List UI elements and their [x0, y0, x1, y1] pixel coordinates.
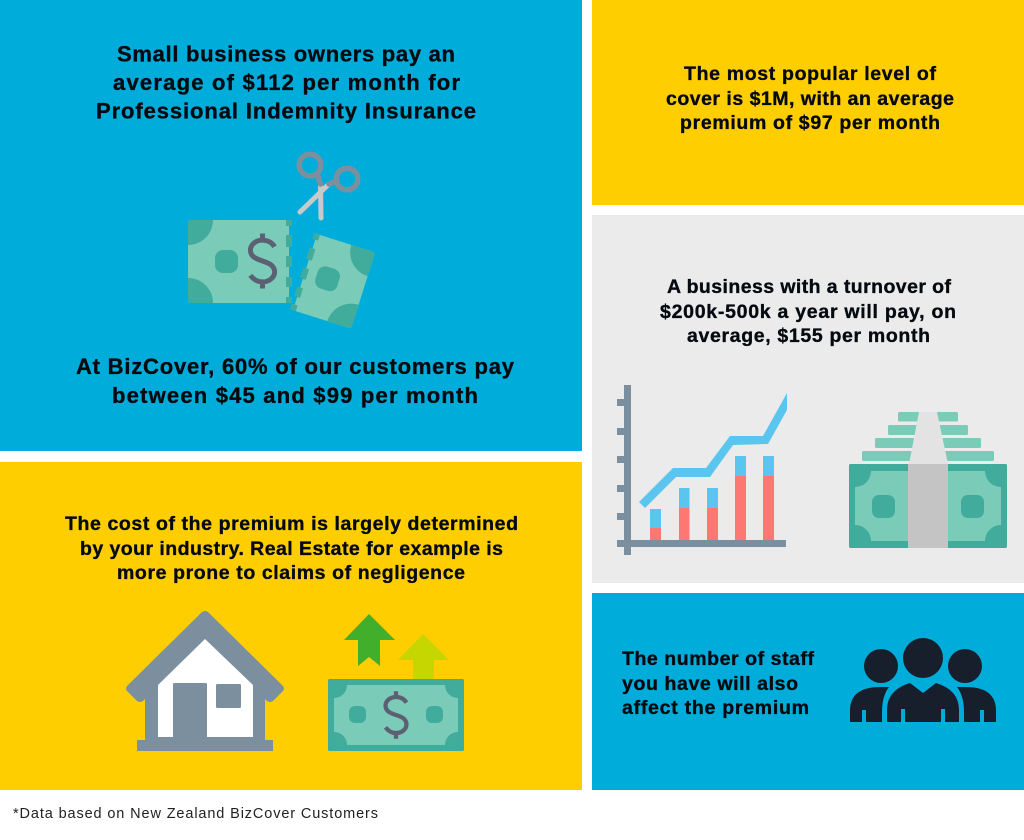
icon: banknote with rising arrows: [328, 614, 464, 751]
panel: turnover: [592, 215, 1024, 583]
text: BizCover customers: [76, 354, 515, 408]
panel: popular cover: [592, 0, 1024, 205]
text: turnover premium: average, $155 per month: [687, 325, 930, 347]
text: industry determines cost: The cost of the premium is largely determined: [65, 513, 518, 535]
text: popular level of cover: The most popular level of: [684, 63, 936, 85]
icon: left bill piece: [188, 220, 292, 303]
icon: right bill piece: [290, 233, 375, 329]
text: turnover premium: A business with a turnover of: [667, 276, 952, 298]
icon: scissors cutting a banknote: [188, 154, 375, 329]
text: popular level of cover: [666, 63, 954, 134]
text: popular level of cover: cover is $1M, with an average: [666, 88, 954, 110]
text: BizCover customers: between $45 and $99 per month: [112, 383, 478, 408]
heading: average premium: Professional Indemnity Insurance: [96, 98, 476, 124]
heading: average premium: average of $112 per month for: [113, 70, 460, 95]
text: number of staff: The number of staff: [622, 648, 814, 670]
icon: lime arrow: [398, 634, 449, 680]
icon: banknote: [328, 679, 464, 751]
chart: rising bars and trend line: [617, 385, 787, 555]
text: BizCover customers: At BizCover, 60% of our customers pay: [76, 354, 515, 379]
text: industry determines cost: [65, 513, 518, 584]
trend line: [639, 393, 787, 508]
text: popular level of cover: premium of $97 per month: [680, 112, 940, 134]
panel: average cost: [0, 0, 582, 451]
footnote: *Data based on New Zealand BizCover Customers: [13, 806, 378, 822]
text: number of staff: you have will also: [622, 673, 798, 695]
panel: staff: [592, 593, 1024, 790]
text: turnover premium: $200k-500k a year will pay, on: [660, 301, 956, 323]
icon: three people: [850, 638, 996, 722]
icon: stack of banknotes: [849, 412, 1007, 548]
text: industry determines cost: by your industry. Real Estate for example is: [80, 538, 503, 560]
text: industry determines cost: more prone to claims of negligence: [117, 562, 465, 584]
text: number of staff: [622, 648, 814, 719]
panel: industry: [0, 462, 582, 790]
icon: scissors: [299, 154, 358, 218]
text: turnover premium: [660, 276, 956, 347]
text: number of staff: affect the premium: [622, 697, 809, 719]
heading: average premium: [96, 42, 476, 124]
icon: house: [126, 611, 284, 751]
icon: green arrow: [344, 614, 395, 666]
heading: average premium: Small business owners pay an: [117, 42, 455, 66]
